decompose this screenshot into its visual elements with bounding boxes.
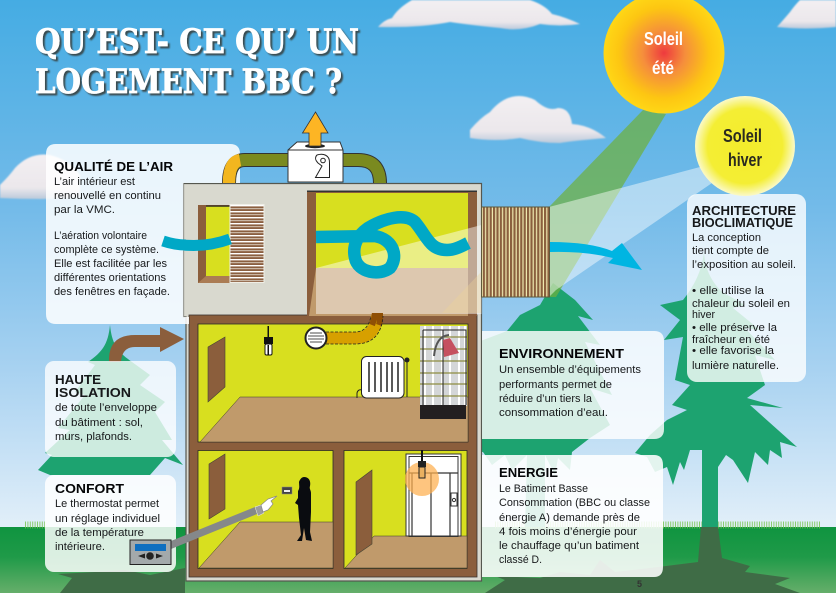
thermostat pointer arm — [171, 496, 277, 549]
tree: left — [38, 325, 183, 475]
panel: energie — [482, 455, 663, 577]
text: energie: le chauffage qu’un batiment — [499, 540, 639, 552]
text: confort: un réglage individuel — [55, 513, 160, 525]
grass ground — [0, 527, 836, 593]
text: architecture bioclimatique: chaleur du soleil en — [692, 298, 790, 310]
text: qualité de l'air — [54, 176, 170, 298]
panel: architecture bioclimatique — [687, 194, 806, 382]
text: energie: énergie A) demande près de — [499, 512, 640, 524]
icon: pointing hand — [261, 496, 277, 512]
text: qualité de l'air: des fenêtres en façade. — [54, 286, 170, 298]
panel: haute isolation — [45, 361, 176, 457]
arrow: air exit — [550, 242, 642, 270]
ventilation box — [288, 142, 343, 182]
sun: summer — [604, 0, 724, 114]
air flow through window — [163, 239, 230, 246]
text: architecture bioclimatique: l’exposition au soleil. — [692, 259, 796, 271]
door: upper floor — [208, 337, 225, 402]
panel: environnement — [482, 331, 664, 439]
text: environnement: performants permet de — [499, 379, 612, 391]
text: environnement — [499, 364, 642, 419]
cloud: top right — [777, 0, 836, 28]
text: energie: 4 fois moins d’énergie pour — [499, 526, 637, 538]
text: architecture bioclimatique: • elle utilise la — [692, 285, 765, 297]
text: confort: intérieure. — [55, 541, 105, 553]
text: haute isolation: de toute l’enveloppe — [55, 402, 157, 414]
tree: behind building — [470, 283, 612, 527]
title: LOGEMENT BBC ? — [35, 62, 342, 101]
cloud: top centre — [378, 0, 580, 29]
grass tufts — [25, 522, 820, 528]
text: architecture bioclimatique: fraîcheur en été — [692, 334, 770, 346]
text: haute isolation: du bâtiment : sol, — [55, 417, 143, 429]
right wall shutter — [482, 207, 550, 297]
building: brown structure — [189, 315, 477, 577]
tree shadows on grass — [58, 527, 800, 593]
ventilation grille — [306, 328, 326, 348]
heading: environnement: ENVIRONNEMENT — [499, 346, 624, 361]
panel: confort — [45, 475, 176, 572]
person silhouette — [295, 477, 312, 541]
beams inside attic — [316, 225, 482, 314]
arrow: insulation — [109, 327, 184, 362]
elevator — [406, 454, 461, 536]
text: architecture bioclimatique: • elle favorise la — [692, 345, 775, 357]
room: lower left — [198, 450, 333, 568]
radiator — [357, 356, 410, 398]
lamp: upper room — [264, 326, 273, 355]
attic room — [307, 190, 477, 316]
text: confort: de la température — [55, 527, 144, 539]
text: qualité de l'air: complète ce système. — [54, 244, 159, 256]
shower cabin — [420, 326, 467, 419]
icon: fan — [316, 154, 330, 178]
heading: haute isolation — [55, 372, 131, 400]
text: confort — [55, 498, 160, 553]
text: haute isolation — [55, 402, 157, 443]
text: qualité de l'air: L’air intérieur est — [54, 176, 135, 188]
text: environnement: réduire d’un tiers la — [499, 393, 593, 405]
heading: confort: CONFORT — [55, 481, 124, 496]
text: qualité de l'air: par la VMC. — [54, 204, 115, 216]
sun: winter: hiver — [728, 150, 762, 170]
thermostat control — [130, 540, 171, 564]
title: QU’EST- CE QU’ UN — [35, 22, 359, 61]
text: qualité de l'air: renouvellé en continu — [54, 190, 161, 202]
text: haute isolation: murs, plafonds. — [55, 431, 132, 443]
left window with shutter — [198, 204, 264, 283]
page number: 5 — [637, 579, 642, 589]
air tube over panel — [163, 241, 186, 245]
summer sun beam — [549, 110, 666, 297]
text: architecture bioclimatique — [692, 232, 796, 372]
tree: right — [635, 252, 797, 527]
text: architecture bioclimatique: hiver — [692, 309, 715, 321]
text: architecture bioclimatique: lumière naturelle. — [692, 360, 779, 372]
heading: architecture bioclimatique: BIOCLIMATIQUE — [692, 215, 793, 230]
arrow: air extraction — [302, 112, 328, 146]
text: energie: Consommation (BBC ou classe — [499, 497, 650, 509]
room: upper floor — [198, 324, 468, 442]
text: architecture bioclimatique: • elle préserve la — [692, 322, 778, 334]
sun: winter: Soleil — [723, 126, 762, 146]
text: architecture bioclimatique: tient compte de — [692, 245, 769, 257]
room: lower right — [344, 450, 467, 568]
title — [35, 22, 359, 101]
panel: qualité de l'air — [46, 144, 240, 324]
text: environnement: consommation d’eau. — [499, 407, 608, 419]
heading: architecture bioclimatique — [692, 203, 796, 230]
sun: summer: été — [652, 58, 674, 78]
cloud: left — [0, 155, 80, 199]
text: confort: Le thermostat permet — [55, 498, 159, 510]
door: lower right — [356, 470, 372, 555]
winter sun beam — [549, 167, 712, 297]
text: qualité de l'air: différentes orientations — [54, 272, 167, 284]
wall thermostat — [282, 487, 292, 494]
text: qualité de l'air: Elle est facilitée par les — [54, 258, 167, 270]
light glow and lamp — [405, 450, 439, 496]
text: energie: Le Batiment Basse — [499, 483, 588, 495]
text: energie — [499, 483, 650, 566]
building: outer walls — [184, 184, 482, 581]
sun: summer: Soleil — [644, 29, 683, 49]
ventilation duct — [326, 316, 383, 344]
text: environnement: Un ensemble d’équipements — [499, 364, 642, 376]
text: qualité de l'air: L’aération volontaire — [54, 230, 147, 242]
door: lower left — [209, 454, 225, 519]
attic air flow tube — [316, 217, 468, 272]
heading: haute isolation: HAUTE — [55, 372, 101, 387]
heading: energie: ENERGIE — [499, 465, 558, 480]
heading: haute isolation: ISOLATION — [55, 385, 131, 400]
cloud: middle — [470, 96, 606, 143]
heading: architecture bioclimatique: ARCHITECTURE — [692, 203, 796, 218]
text: architecture bioclimatique: La conception — [692, 232, 761, 244]
sun: winter — [695, 96, 795, 196]
heading: qualité de l'air: QUALITÉ DE L’AIR — [54, 159, 174, 174]
roof ducts — [229, 160, 380, 183]
text: energie: classé D. — [499, 554, 542, 566]
